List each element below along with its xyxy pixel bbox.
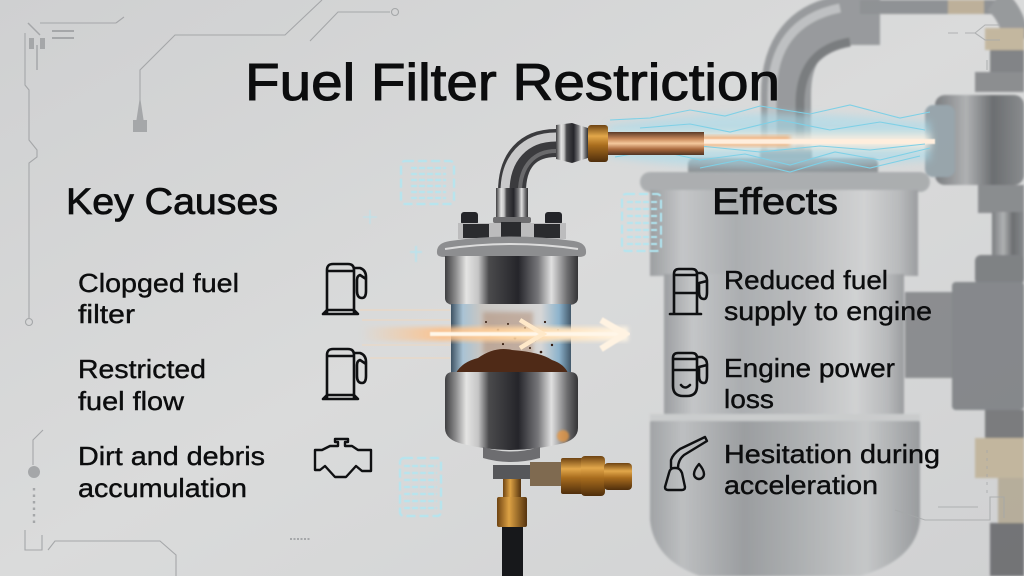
effect: engine power loss [724, 353, 895, 414]
steel elbow [505, 137, 556, 192]
holographic data panels [363, 161, 661, 516]
effect: engine power loss: Engine power [724, 353, 895, 383]
icon: fuel pump [323, 349, 366, 399]
lower canister [445, 372, 578, 450]
icon: engine [315, 439, 371, 477]
brass lower fitting and hose [503, 479, 521, 497]
brass side fitting [530, 462, 563, 486]
cause: dirt and debris accumulation: Dirt and debris [78, 441, 265, 471]
cause: dirt and debris accumulation: accumulation [78, 473, 247, 503]
panel: effects [665, 181, 940, 500]
lightning strands [610, 105, 930, 172]
fuel line with energy beam [505, 105, 935, 192]
flow arrows [360, 310, 628, 358]
icon: fuel pump [323, 264, 366, 314]
energy beam glow [608, 114, 935, 167]
effect: engine power loss: loss [724, 384, 774, 414]
icon: fuel pump [670, 269, 707, 314]
effect: hesitation during acceleration: acceleration [724, 470, 878, 500]
cause: dirt and debris accumulation [78, 441, 265, 503]
cause: clogged fuel filter: filter [78, 299, 135, 329]
effect: hesitation during acceleration [724, 439, 940, 500]
effect: hesitation during acceleration: Hesitation during [724, 439, 940, 469]
copper pipe [604, 132, 704, 155]
flange [437, 236, 586, 257]
glass section [451, 304, 571, 373]
debris pile [456, 349, 568, 373]
outlet collar [496, 188, 528, 220]
brass nut [588, 125, 608, 162]
cause: clogged fuel filter: Clopged fuel [78, 268, 239, 298]
upper canister [445, 256, 578, 305]
effect: reduced fuel supply: Reduced fuel [724, 265, 888, 295]
central fuel filter [437, 188, 632, 576]
bolts [461, 212, 478, 225]
cause: restricted fuel flow: fuel flow [78, 386, 184, 416]
icon: fuel nozzle and drop [665, 437, 707, 490]
effect: reduced fuel supply [724, 265, 932, 326]
heading: effects: Effects [712, 181, 838, 222]
cause: restricted fuel flow: Restricted [78, 354, 206, 384]
title: Fuel Filter Restriction [245, 54, 780, 112]
cause: restricted fuel flow [78, 354, 206, 416]
lower neck and nut [483, 447, 540, 462]
steel nut [556, 123, 588, 163]
panel: key causes [66, 181, 371, 503]
heading: key causes: Key Causes [66, 181, 278, 222]
effect: reduced fuel supply: supply to engine [724, 296, 932, 326]
cause: clogged fuel filter [78, 268, 239, 329]
icon: fuel gauge pump [673, 353, 707, 396]
background: ghosted fuel filter and plumbing [640, 0, 1024, 576]
